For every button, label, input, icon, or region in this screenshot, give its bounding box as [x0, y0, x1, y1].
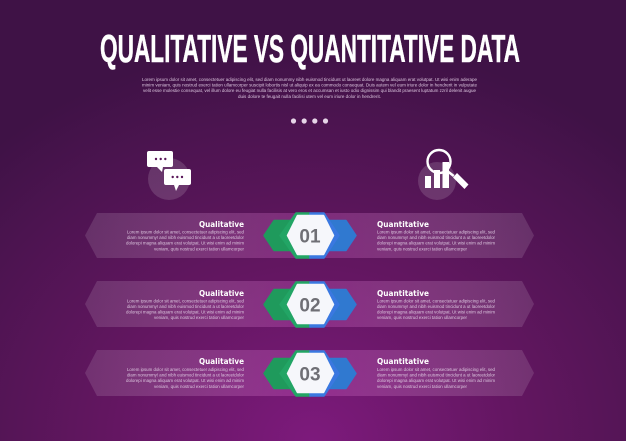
intro paragraph: Lorem ipsum dolor sit amet, consectetuer adipiscing elit, sed diam nonummy nibh euismod tincidunt ut laoreet dolore magna aliquam erat volutpat. Ut wisi enim aderape [142, 77, 478, 82]
panel: qualitative band [85, 281, 310, 327]
text: quantitative description: Lorem ipsum dolor sit amet, consectetuer adipiscing elit, sed [377, 298, 496, 303]
text: quantitative description: veniam, quis nostrud exerci tation ullamcorper [377, 315, 468, 320]
intro paragraph: duis dolore te feugait nulla facilisi utem vel eum iriure dolor in hendrerit. [238, 94, 381, 99]
badge: 01 [264, 213, 356, 258]
heading: qualitative: Qualitative [199, 220, 245, 229]
text: qualitative description [126, 298, 245, 320]
text: quantitative description: dolorepi magna aliquam erat volutpat. Ut wisi enim ad minim [377, 378, 495, 383]
text: quantitative description [377, 229, 496, 251]
heading: qualitative: Qualitative [199, 289, 245, 298]
panel: quantitative band [310, 350, 534, 396]
text: qualitative description: diam nonummy! and nibh euismod tincidunt a ut laoreetdolor [127, 372, 245, 378]
heading: qualitative: Qualitative [199, 357, 245, 366]
text: quantitative description: dolorepi magna aliquam erat volutpat. Ut wisi enim ad minim [377, 310, 495, 314]
text: qualitative description: dolorepi magna aliquam erat volutpat. Ut wisi enim ad minim [126, 310, 244, 314]
badge: 03 [264, 351, 356, 396]
text: quantitative description: veniam, quis nostrud exerci tation ullamcorper [377, 246, 468, 251]
badge: 02 [264, 282, 356, 327]
text: quantitative description: dolorepi magna aliquam erat volutpat. Ut wisi enim ad minim [377, 241, 495, 246]
panel: quantitative band [310, 281, 534, 327]
intro paragraph: velit esse molestie consequat, vel illum dolore eu feugiat nulla facilisis at vero eros et accumsan et iusto odio dignissim qui blandit praesent luptatum zzril delenit augue [143, 88, 477, 93]
text: qualitative description: diam nonummy! and nibh euismod tincidunt a ut laoreetdolor [127, 235, 245, 240]
badge: 03: 03 [299, 364, 321, 386]
text: qualitative description: veniam, quis nostrud exerci tation ullamcorper [154, 315, 245, 320]
text: quantitative description: veniam, quis nostrud exerci tation ullamcorper [377, 384, 468, 389]
text: qualitative description: Lorem ipsum dolor sit amet, consectetuer adipiscing elit, sed [127, 298, 245, 303]
text: qualitative description: dolorepi magna aliquam erat volutpat. Ut wisi enim ad minim [126, 378, 244, 383]
icon: speech bubbles [147, 151, 191, 200]
panel: quantitative band [310, 213, 534, 258]
row 3 [85, 350, 534, 396]
text: quantitative description [377, 298, 496, 320]
text: qualitative description: veniam, quis nostrud exerci tation ullamcorper [154, 384, 245, 389]
heading: quantitative: Quantitative [377, 357, 430, 366]
text: qualitative description: Lorem ipsum dolor sit amet, consectetuer adipiscing elit, sed [127, 367, 245, 372]
text: qualitative description: diam nonummy! and nibh euismod tincidunt a ut laoreetdolor [127, 304, 245, 309]
text: qualitative description: veniam, quis nostrud exerci tation ullamcorper [154, 246, 245, 251]
text: quantitative description: Lorem ipsum dolor sit amet, consectetuer adipiscing elit, sed [377, 367, 496, 372]
intro paragraph [142, 77, 478, 99]
pagination dots [291, 118, 328, 124]
row 2 [85, 281, 534, 327]
text: qualitative description [126, 367, 245, 389]
badge: 01: 01 [299, 226, 321, 247]
icon: magnifier over bar chart [418, 150, 468, 200]
badge: 02: 02 [299, 295, 321, 316]
text: quantitative description [377, 367, 496, 389]
text: qualitative description [126, 229, 245, 251]
text: qualitative description: Lorem ipsum dolor sit amet, consectetuer adipiscing elit, sed [127, 229, 245, 234]
text: qualitative description: dolorepi magna aliquam erat volutpat. Ut wisi enim ad minim [126, 241, 244, 246]
text: quantitative description: Lorem ipsum dolor sit amet, consectetuer adipiscing elit, sed [377, 229, 496, 234]
row 1 [85, 213, 534, 258]
heading: quantitative: Quantitative [377, 289, 430, 298]
text: quantitative description: diam nonummy! and nibh euismod tincidunt a ut laoreetdolor [377, 372, 496, 378]
text: quantitative description: diam nonummy! and nibh euismod tincidunt a ut laoreetdolor [377, 304, 496, 309]
intro paragraph: minim veniam, quis nostrud exerci tation ullamcorper suscipit lobortis nisl ut aliquip ex ea commodo consequat. Duis autem vel eum iriure dolor in hendrerit in vulputate [142, 82, 478, 88]
panel: qualitative band [85, 213, 310, 258]
heading: quantitative: Quantitative [377, 220, 430, 229]
text: quantitative description: diam nonummy! and nibh euismod tincidunt a ut laoreetdolor [377, 235, 496, 240]
panel: qualitative band [85, 350, 310, 396]
